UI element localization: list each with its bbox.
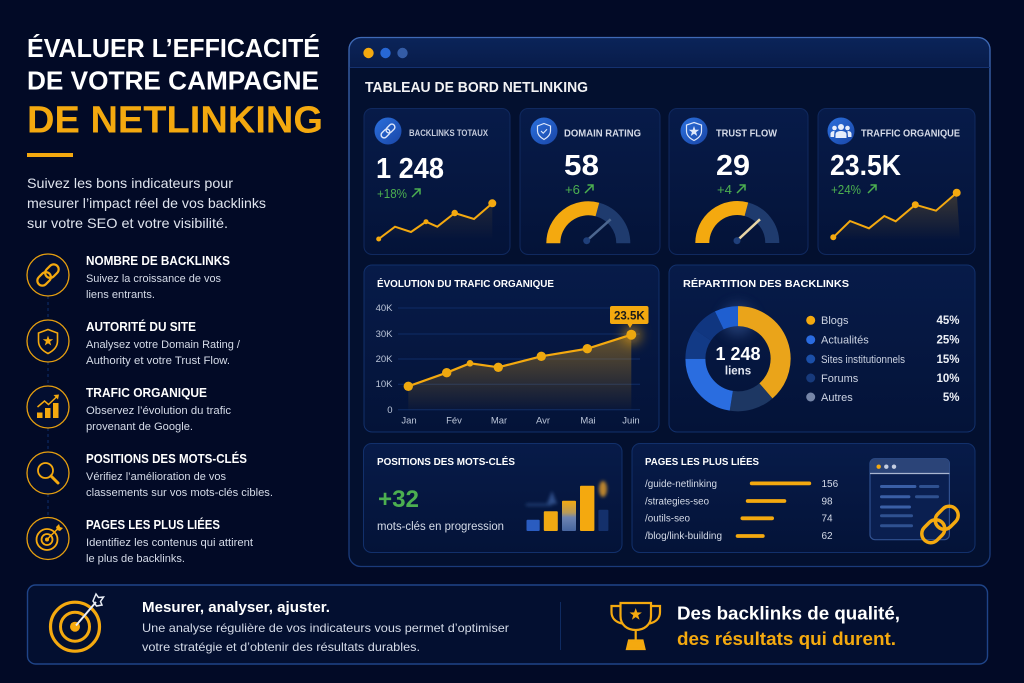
legend: 10% — [936, 373, 960, 385]
card: trust flow: TRUST FLOW — [716, 128, 778, 140]
dashboard heading: TABLEAU DE BORD NETLINKING — [365, 79, 588, 96]
item: trafic organique: provenant de Google. — [86, 421, 193, 433]
footer slogan: des résultats qui durent. — [677, 629, 896, 649]
footer slogan: Des backlinks de qualité, — [677, 604, 900, 624]
card: trust flow: +4 — [717, 183, 732, 197]
page rows: 74 — [822, 514, 833, 525]
card: domain rating: +6 — [565, 183, 580, 197]
x axis labels: Mar — [491, 416, 507, 426]
title: DE VOTRE CAMPAGNE — [27, 66, 319, 96]
icon: browser window with chain — [870, 459, 962, 546]
legend: 45% — [936, 315, 960, 327]
footer slogan — [677, 604, 900, 649]
intro text: mesurer l’impact réel de vos backlinks — [27, 195, 266, 211]
card: pages les plus liées — [632, 444, 975, 552]
legend — [806, 315, 960, 404]
item: autorité du site: Authority et votre Trust Flow. — [86, 355, 230, 367]
y axis labels — [376, 303, 393, 416]
donut chart: liens — [725, 366, 751, 378]
item: nombre de backlinks: Suivez la croissance de vos — [86, 273, 221, 285]
page rows — [645, 479, 839, 542]
card: trust flow — [669, 108, 808, 254]
item: trafic organique — [27, 386, 232, 433]
panel: dashboard — [349, 38, 990, 566]
card: trust flow: 29 — [716, 150, 750, 182]
x axis labels: Fév — [446, 416, 462, 426]
card: positions des mots-clés: POSITIONS DES MOTS-CLÉS — [377, 455, 515, 468]
item: pages les plus liées: le plus de backlinks. — [86, 553, 185, 565]
card: backlinks totaux: +18% — [377, 187, 407, 201]
card: donut: RÉPARTITION DES BACKLINKS — [683, 277, 849, 290]
page rows: /outils-seo — [645, 514, 690, 525]
card: domain rating: DOMAIN RATING — [564, 128, 641, 140]
card: backlinks totaux: 1 248 — [376, 153, 444, 185]
page rows: 156 — [822, 479, 839, 490]
donut chart: 1 248 — [716, 344, 760, 364]
y axis labels: 40K — [376, 303, 393, 314]
x axis labels: Avr — [536, 416, 550, 426]
title: DE NETLINKING — [27, 100, 323, 142]
gauge — [702, 208, 772, 244]
item: trafic organique: TRAFIC ORGANIQUE — [86, 386, 207, 400]
item: pages les plus liées: Identifiez les contenus qui attirent — [86, 537, 253, 549]
item: autorité du site: Analysez votre Domain Rating / — [86, 339, 241, 351]
item: positions des mots-clés — [27, 451, 273, 499]
y axis labels: 10K — [376, 379, 393, 390]
y axis labels: 0 — [387, 405, 392, 416]
item: pages les plus liées: PAGES LES PLUS LIÉES — [86, 517, 220, 532]
y axis labels: 20K — [376, 354, 393, 365]
card: line chart — [364, 265, 659, 432]
legend: Forums — [821, 373, 859, 385]
icon: trophy — [612, 603, 660, 649]
window dots — [363, 48, 408, 58]
intro text — [27, 175, 266, 231]
page rows: /strategies-seo — [645, 496, 709, 507]
card: backlinks totaux — [364, 108, 510, 254]
gauge — [553, 208, 623, 244]
card: positions des mots-clés: mots-clés en progression — [377, 521, 504, 533]
card: positions des mots-clés — [364, 444, 622, 552]
card: domain rating: 58 — [564, 150, 599, 182]
card: backlinks totaux: BACKLINKS TOTAUX — [409, 128, 489, 139]
footer message: Mesurer, analyser, ajuster. — [142, 599, 330, 616]
item: positions des mots-clés: Vérifiez l’amélioration de vos — [86, 471, 226, 483]
item: nombre de backlinks: liens entrants. — [86, 289, 155, 301]
legend: 25% — [936, 334, 960, 346]
icon: target with arrow — [50, 594, 104, 651]
tooltip — [610, 306, 648, 328]
x axis labels — [401, 416, 640, 426]
card: trafic organique: TRAFFIC ORGANIQUE — [861, 128, 960, 140]
item: pages les plus liées — [27, 517, 253, 565]
legend: Blogs — [821, 315, 849, 327]
item: positions des mots-clés: POSITIONS DES MOTS-CLÉS — [86, 451, 247, 466]
legend: Sites institutionnels — [821, 354, 905, 366]
title — [27, 33, 323, 142]
legend: Actualités — [821, 334, 869, 346]
legend: 15% — [936, 354, 960, 366]
card: pages les plus liées: PAGES LES PLUS LIÉES — [645, 455, 759, 468]
legend: Autres — [821, 392, 853, 404]
panel: footer banner — [28, 585, 988, 664]
card: trafic organique — [818, 108, 975, 254]
card: domain rating — [520, 108, 660, 254]
legend: 5% — [943, 392, 960, 404]
item: autorité du site: AUTORITÉ DU SITE — [86, 319, 196, 334]
intro text: Suivez les bons indicateurs pour — [27, 175, 233, 191]
y axis labels: 30K — [376, 329, 393, 340]
footer message: votre stratégie et d’obtenir des résultats durables. — [142, 640, 420, 654]
page rows: /guide-netlinking — [645, 479, 717, 490]
card: line chart: ÉVOLUTION DU TRAFIC ORGANIQUE — [377, 277, 554, 290]
item: nombre de backlinks: NOMBRE DE BACKLINKS — [86, 254, 230, 268]
item: nombre de backlinks — [27, 254, 230, 301]
page rows: /blog/link-building — [645, 531, 722, 542]
card: trafic organique: 23.5K — [830, 150, 901, 182]
intro text: sur votre SEO et votre visibilité. — [27, 215, 228, 231]
title accent bar — [27, 153, 73, 157]
title: ÉVALUER L’EFFICACITÉ — [27, 33, 320, 63]
x axis labels: Juin — [622, 416, 640, 426]
item: autorité du site — [27, 319, 241, 367]
bar chart — [526, 481, 608, 531]
card: trafic organique: +24% — [831, 183, 861, 197]
footer message: Une analyse régulière de vos indicateurs vous permet d’optimiser — [142, 621, 509, 635]
card: donut — [669, 265, 975, 432]
item: trafic organique: Observez l’évolution du trafic — [86, 405, 232, 417]
donut chart — [695, 304, 781, 401]
page rows: 98 — [822, 496, 833, 507]
x axis labels: Jan — [401, 416, 417, 426]
footer message — [142, 599, 509, 654]
tooltip: 23.5K — [614, 310, 645, 322]
item: positions des mots-clés: classements sur vos mots-clés cibles. — [86, 487, 273, 499]
indicator list — [27, 254, 273, 565]
x axis labels: Mai — [580, 416, 596, 426]
card: positions des mots-clés: +32 — [378, 486, 419, 513]
page rows: 62 — [822, 531, 833, 542]
